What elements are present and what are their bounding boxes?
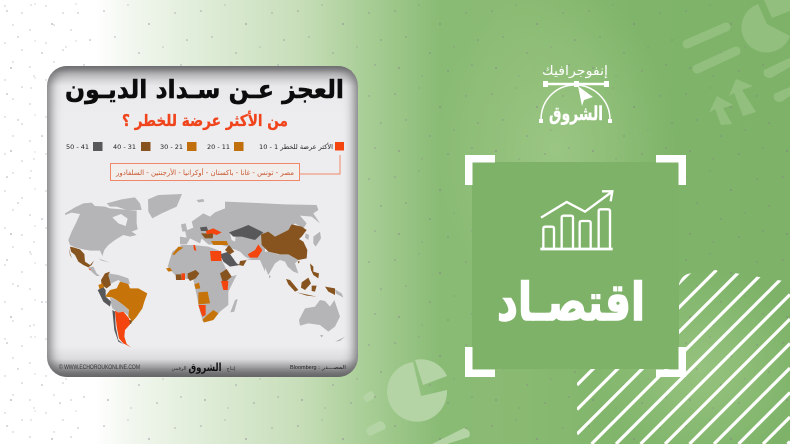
footer: source [290,365,347,371]
title: العجز عـن سـداد الديـون [65,75,344,105]
section label: اقتصـاد [497,273,645,333]
icon: bottom left pills [363,391,470,444]
footer: producer logo: إنتاج [226,366,236,372]
legend: 40 - 31 [113,143,136,151]
icon: bar chart with arrow [540,191,613,249]
logo: infographic shorouk [539,64,612,125]
icon: bottom left pie [387,359,447,422]
map: Asia and Oceania countries [248,224,335,297]
legend: 50 - 41 [66,143,89,151]
footer: source: Bloomberg [290,365,317,371]
panel: infographic map card [47,66,358,377]
legend [66,142,344,151]
callout: top risk countries [110,155,340,180]
legend: 30 - 21 [160,143,183,151]
logo wordmark: الشروق [549,103,603,125]
map: Asia and Oceania land [225,202,345,342]
subtitle: من الأكثر عرضة للخطر ؟ [122,111,288,130]
map: Europe, Africa and Middle East [166,199,265,322]
logo caption: إنفوجرافيك [542,64,608,79]
green square [472,162,679,369]
footer: producer logo [171,361,236,374]
footer: source: : المصـــدر [318,365,347,371]
world map [65,194,345,347]
legend: 10 - 1 الأكثر عرضة للخطر [259,142,333,151]
panel: section card [465,64,686,377]
icon: top right pie [741,0,790,53]
footer: website: © WWW.ECHOROUKONLINE.COM [59,364,140,371]
footer: producer logo: الشروق [188,361,222,374]
footer: producer logo: الرقمي [171,366,187,372]
corner brackets [465,155,686,377]
diagonal stripes [577,270,790,444]
icon: top right arrows [709,79,756,125]
map: Americas [65,194,182,347]
logo bezier handle [541,84,610,120]
callout: top risk countries: مصر - تونس - غانا - باكستان - أوكرانيا - الأرجنتين - السلفادور [115,168,294,177]
icon: right edge pills [764,58,790,102]
icon: top right pills [687,27,736,69]
legend: 20 - 11 [207,143,230,151]
